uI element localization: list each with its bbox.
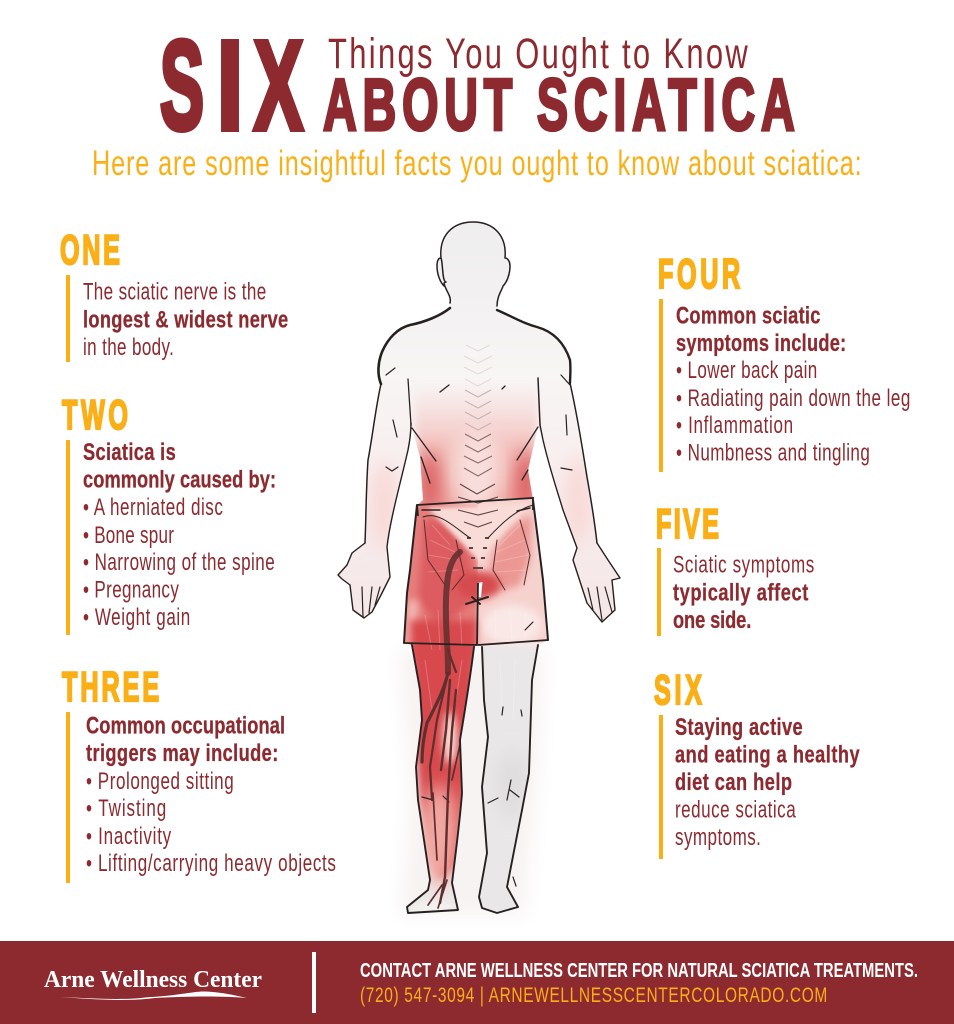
heading: two: TWO xyxy=(62,393,128,439)
text block: four: • Numbness and tingling xyxy=(676,440,870,466)
text block: two: commonly caused by: xyxy=(83,466,276,493)
shorts region tints xyxy=(400,505,478,660)
text block: three: • Inactivity xyxy=(86,823,172,850)
text block: one: longest & widest nerve xyxy=(83,306,288,333)
body outline xyxy=(338,222,620,913)
text block: one: in the body. xyxy=(83,334,174,361)
soft halo around legs xyxy=(398,650,545,915)
text block: five xyxy=(673,552,814,634)
text block: two xyxy=(83,439,276,631)
subtitle: Here are some insightful facts you ought to know about sciatica: xyxy=(92,144,862,183)
text block: two: • Weight gain xyxy=(83,604,190,631)
title word: SIX: I xyxy=(217,15,243,156)
heading: three: THREE xyxy=(62,665,159,711)
text block: four: Common sciatic xyxy=(676,302,821,329)
shorts outline xyxy=(404,498,548,645)
panel: five xyxy=(656,502,814,636)
text block: five: typically affect xyxy=(673,579,808,606)
spine xyxy=(458,345,498,568)
text block: two: • Bone spur xyxy=(83,522,174,549)
finger lines xyxy=(362,587,612,620)
text block: two: Sciatica is xyxy=(83,439,176,466)
logo: Arne Wellness Center xyxy=(44,967,262,993)
panel: four xyxy=(658,252,910,472)
text block: six xyxy=(675,714,860,851)
text block: one: The sciatic nerve is the xyxy=(83,279,266,305)
contact line: CONTACT ARNE WELLNESS CENTER FOR NATURAL SCIATICA TREATMENTS. xyxy=(360,959,918,982)
sciatic nerve xyxy=(422,552,460,908)
text block: two: • Narrowing of the spine xyxy=(83,549,275,576)
text block: four xyxy=(676,302,910,466)
text block: four: symptoms include: xyxy=(676,330,846,357)
panel: one xyxy=(60,228,288,362)
text block: five: Sciatic symptoms xyxy=(673,552,814,578)
muscle fibres xyxy=(425,525,528,720)
title word: SIX: X xyxy=(254,15,303,156)
text block: two: • Pregnancy xyxy=(83,577,179,603)
text block: three: • Prolonged sitting xyxy=(86,768,234,795)
illustration: human body, rear view, with sciatic nerve xyxy=(330,215,630,920)
heading: one: ONE xyxy=(60,228,120,274)
text block: three: • Twisting xyxy=(86,795,166,822)
panel: three xyxy=(62,665,336,883)
heading: six: SIX xyxy=(654,668,702,714)
text block: three: triggers may include: xyxy=(86,740,278,767)
text block: three: Common occupational xyxy=(86,712,285,739)
heading: four: FOUR xyxy=(658,252,740,298)
text block: one xyxy=(83,279,288,361)
title word: SIX: S xyxy=(160,15,204,156)
footer band xyxy=(0,941,954,1024)
title line: about sciatica: ABOUT SCIATICA xyxy=(323,64,795,145)
text block: three xyxy=(86,712,336,877)
text block: four: • Inflammation xyxy=(676,412,793,439)
title word: SIX xyxy=(160,15,303,156)
phone and website: (720) 547-3094 | ARNEWELLNESSCENTERCOLORADO.COM xyxy=(360,982,827,1007)
panel: two xyxy=(62,393,276,635)
body colouring xyxy=(330,215,630,920)
title xyxy=(160,15,795,156)
text block: six: diet can help xyxy=(675,769,792,796)
text block: four: • Lower back pain xyxy=(676,357,817,384)
text block: six: symptoms. xyxy=(675,824,761,851)
text block: six: reduce sciatica xyxy=(675,797,796,823)
panel: six xyxy=(654,668,860,859)
text block: three: • Lifting/carrying heavy objects xyxy=(86,850,336,877)
text block: four: • Radiating pain down the leg xyxy=(676,385,910,412)
title line: things you ought to know: Things You Ought to Know xyxy=(328,29,749,77)
heading: five: FIVE xyxy=(656,502,719,548)
text block: two: • A herniated disc xyxy=(83,494,223,521)
muscle and pelvis lines xyxy=(362,368,612,886)
text block: five: one side. xyxy=(673,607,751,634)
text block: six: Staying active xyxy=(675,714,803,741)
text block: six: and eating a healthy xyxy=(675,741,860,768)
